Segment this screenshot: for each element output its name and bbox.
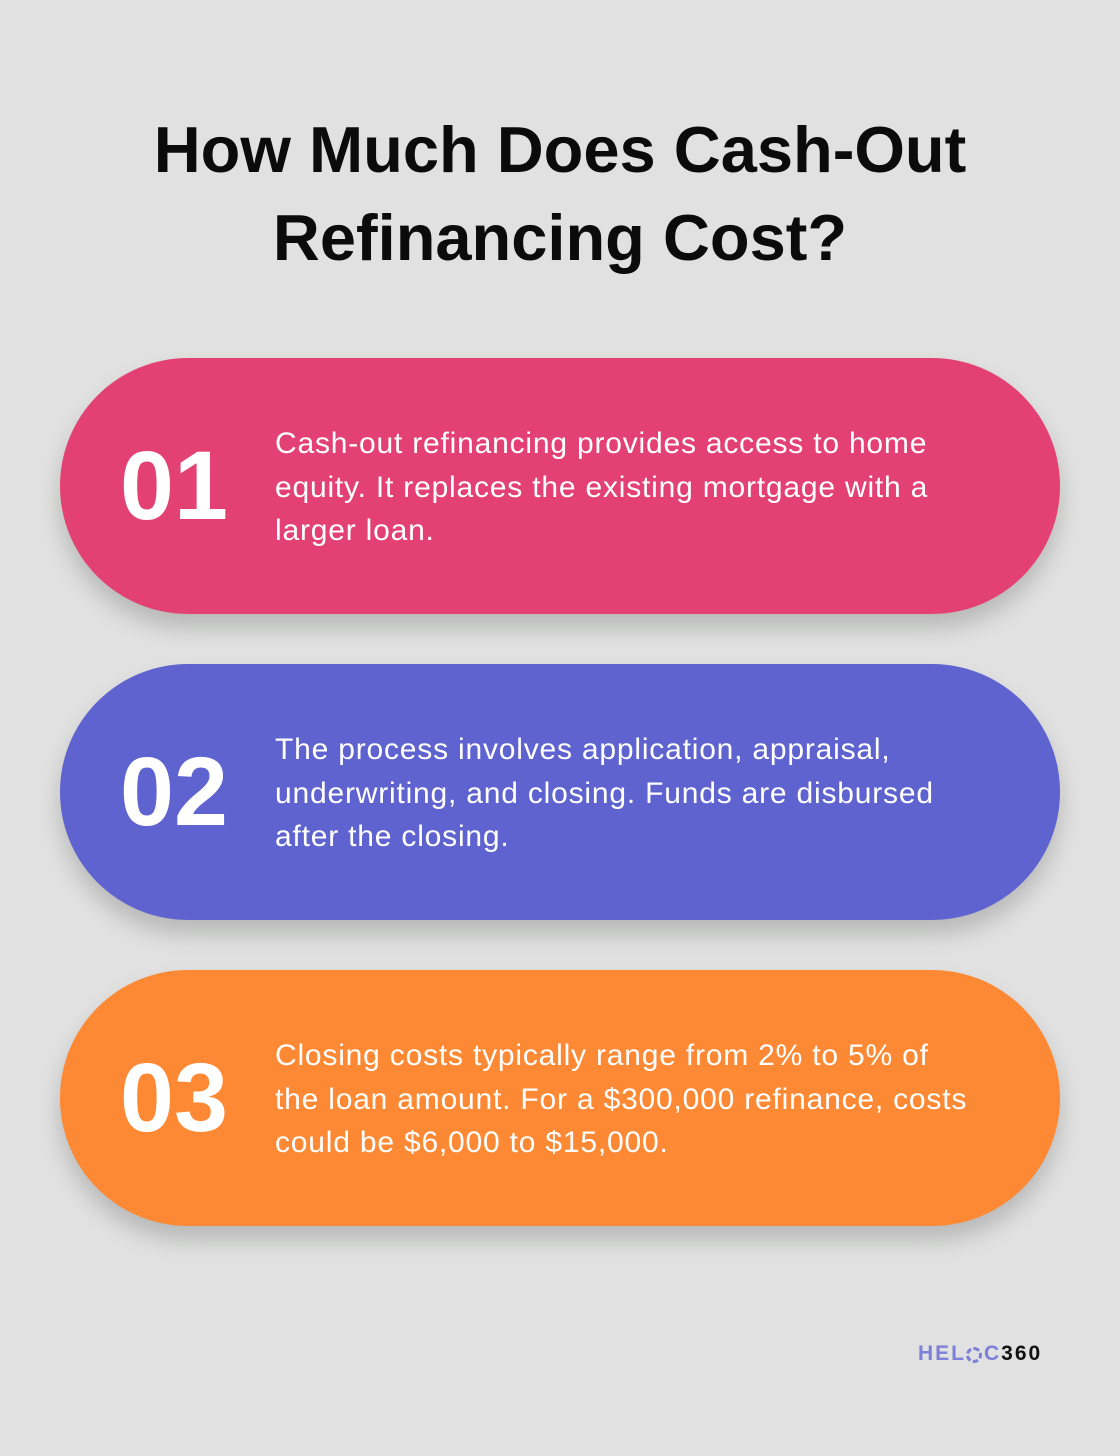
number 03: 03 xyxy=(120,1043,228,1152)
title xyxy=(154,113,966,274)
title: Refinancing Cost? xyxy=(273,201,847,274)
card 02 xyxy=(60,664,1060,920)
text 02: after the closing. xyxy=(275,820,510,853)
text 02: underwriting, and closing. Funds are disbursed xyxy=(275,776,934,810)
card 03 xyxy=(60,970,1060,1226)
title: How Much Does Cash-Out xyxy=(154,113,966,186)
number 01: 01 xyxy=(120,431,228,540)
text 01: equity. It replaces the existing mortgage with a xyxy=(275,470,928,504)
text 03 xyxy=(275,1039,967,1159)
card 01 xyxy=(60,358,1060,614)
text 01 xyxy=(275,427,928,547)
text 03: Closing costs typically range from 2% to 5% of xyxy=(275,1039,929,1072)
text 02 xyxy=(275,733,934,853)
text 03: the loan amount. For a $300,000 refinance, costs xyxy=(275,1082,967,1116)
number 02: 02 xyxy=(120,737,228,846)
text 03: could be $6,000 to $15,000. xyxy=(275,1126,669,1159)
text 02: The process involves application, appraisal, xyxy=(275,733,891,766)
logo: HEL C360 xyxy=(918,1342,1042,1365)
text 01: larger loan. xyxy=(275,514,435,547)
text 01: Cash-out refinancing provides access to home xyxy=(275,427,927,460)
